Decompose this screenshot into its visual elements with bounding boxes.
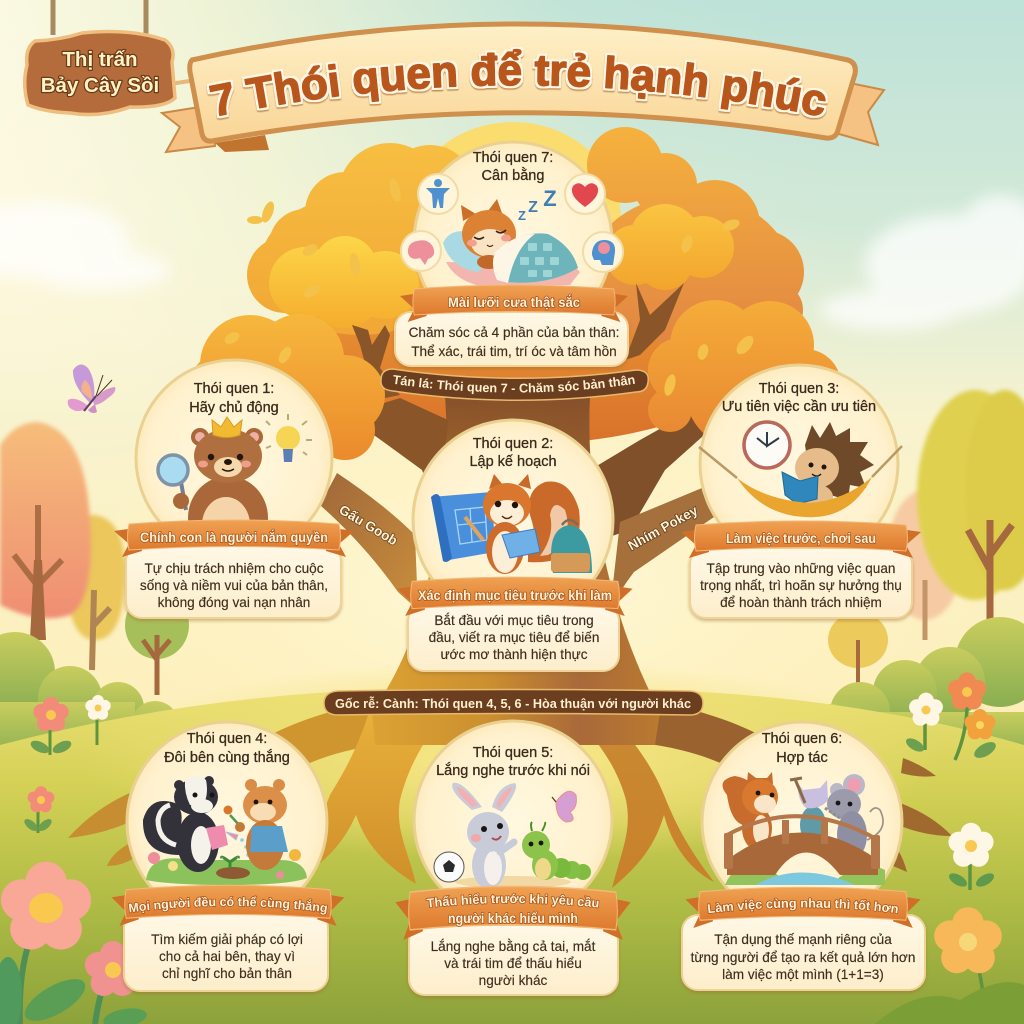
wooden town sign xyxy=(25,0,175,115)
habit 1 circle xyxy=(136,360,332,556)
icon: head with brain xyxy=(583,232,623,272)
banner tail right xyxy=(825,80,884,145)
background trees right xyxy=(828,390,1024,690)
illustration: hedgehog in hammock with clock xyxy=(699,422,902,517)
canopy lower left xyxy=(190,314,385,460)
panel: habit 1 xyxy=(114,360,354,618)
title: 7 Thói quen để trẻ hạnh phúc xyxy=(206,46,828,120)
banner board xyxy=(190,24,855,141)
habit 7 description box xyxy=(395,312,628,366)
habit 5 description: và trái tim để thấu hiểu xyxy=(444,956,582,971)
habit 2 ribbon text: Xác định mục tiêu trước khi làm xyxy=(418,588,612,603)
habit 7 title: Cân bằng xyxy=(482,167,544,184)
icon: heart xyxy=(565,174,605,214)
title banner xyxy=(160,22,886,154)
sign board xyxy=(25,32,175,115)
habit 4 description box xyxy=(124,912,328,991)
flowers right xyxy=(875,672,1024,1024)
habit 3 description: trọng nhất, trì hoãn sự hưởng thụ xyxy=(700,578,902,593)
habit 2 title: Thói quen 2: xyxy=(473,436,553,452)
banner rod xyxy=(170,80,196,84)
habit 3 description: để hoàn thành trách nhiệm xyxy=(720,595,882,610)
label: canopy xyxy=(380,368,649,401)
bushes xyxy=(0,617,1024,760)
habit 1 description box xyxy=(126,545,341,618)
habit 5 description: người khác xyxy=(479,973,548,988)
habit 3 ribbon text: Làm việc trước, chơi sau xyxy=(726,531,876,546)
habit 5 title: Thói quen 5: xyxy=(473,745,553,761)
habit 7 circle xyxy=(414,142,612,340)
canopy forks xyxy=(352,325,400,400)
icon: brain xyxy=(401,231,441,271)
habit 1 description: không đóng vai nạn nhân xyxy=(158,595,310,610)
habit 6 ribbon text: Làm việc cùng nhau thì tốt hơn xyxy=(706,898,898,914)
habit 3 title: Ưu tiên việc cần ưu tiên xyxy=(722,399,876,415)
habit 4 description: chỉ nghĩ cho bản thân xyxy=(162,966,292,981)
illustration: bear with magnifier xyxy=(158,414,312,560)
habit 4 description: cho cả hai bên, thay vì xyxy=(159,949,295,964)
habit 5 ribbon text: người khác hiểu mình xyxy=(448,911,578,926)
habit 7 ribbon text: Mài lưỡi cưa thật sắc xyxy=(448,295,580,310)
habit 5 title: Lắng nghe trước khi nói xyxy=(436,762,590,779)
grass hill xyxy=(0,660,1024,1024)
canopy leaves xyxy=(223,177,757,397)
illustration: friends building a bridge xyxy=(722,772,885,885)
habit 6 title: Thói quen 6: xyxy=(762,731,842,747)
habit 2 description: đầu, viết ra mục tiêu để biến xyxy=(429,630,599,645)
illustration: rabbit, ball, caterpillar xyxy=(434,783,591,889)
habit 6 description: Tận dụng thế mạnh riêng của xyxy=(714,932,892,947)
panel: habit 2 xyxy=(397,420,633,671)
habit 2 description: Bắt đầu với mục tiêu trong xyxy=(434,613,594,628)
canopy shade xyxy=(270,275,750,445)
icon: butterfly xyxy=(68,364,115,413)
habit 4 ribbon text: Mọi người đều có thể cùng thắng xyxy=(128,896,328,916)
panel: habit 6 xyxy=(680,720,927,994)
illustration: sleeping squirrel xyxy=(443,199,580,286)
banner tail left xyxy=(162,105,215,152)
label: roots and branches: Gốc rễ: Cành: Thói quen 4, 5, 6 - Hòa thuận với người khác xyxy=(335,696,691,711)
branch: Gấu Goob xyxy=(320,473,418,610)
habit 4 title: Đôi bên cùng thắng xyxy=(164,749,290,766)
habit 6 title: Hợp tác xyxy=(776,750,828,766)
habit 3 circle xyxy=(700,365,898,563)
illustration: squirrel with blueprint and backpack xyxy=(431,474,592,574)
habit 4 ribbon xyxy=(112,885,344,926)
habit 1 title: Hãy chủ động xyxy=(189,400,279,416)
habit 7 title: Thói quen 7: xyxy=(473,150,553,166)
canopy front yellow left xyxy=(269,236,419,328)
habit 1 description: Tự chịu trách nhiệm cho cuộc xyxy=(144,561,324,576)
habit 1 ribbon xyxy=(114,520,354,557)
background trees left xyxy=(0,422,189,695)
habit 5 ribbon text xyxy=(426,892,600,927)
habit 3 ribbon xyxy=(681,521,921,558)
tree trunk and branches xyxy=(320,395,714,745)
habit 2 description: ước mơ thành hiện thực xyxy=(440,647,588,662)
canopy front yellow right xyxy=(605,204,734,290)
label: roots and branches xyxy=(324,690,703,715)
habit 4 circle xyxy=(127,722,327,922)
habit 5 description box xyxy=(409,925,618,995)
habit 1 description: sống và niềm vui của bản thân, xyxy=(140,578,328,593)
zzz: Z xyxy=(518,208,526,223)
panel: habit 5 xyxy=(396,720,630,999)
habit 6 description: từng người để tạo ra kết quả lớn hơn xyxy=(691,950,915,965)
habit 6 ribbon xyxy=(685,887,921,928)
habit 4 description: Tìm kiếm giải pháp có lợi xyxy=(151,932,303,947)
flowers left xyxy=(0,695,148,1024)
habit 6 circle xyxy=(702,722,902,922)
habit 2 description box xyxy=(408,605,619,671)
sign text: Thị trấn xyxy=(62,48,138,71)
habit 2 title: Lập kế hoạch xyxy=(469,454,557,470)
habit 5 ribbon xyxy=(395,886,631,940)
panel: habit 3 xyxy=(681,365,921,618)
panel: habit 7 xyxy=(395,142,628,366)
habit 3 description: Tập trung vào những việc quan xyxy=(707,561,895,576)
tree roots xyxy=(68,695,952,888)
banner fold xyxy=(215,135,269,152)
habit 4 title: Thói quen 4: xyxy=(187,731,267,747)
habit 2 ribbon xyxy=(397,577,633,616)
habit 6 description: làm việc một mình (1+1=3) xyxy=(722,967,884,982)
tree canopy xyxy=(190,122,841,460)
branch: Nhím Pokey: Nhím Pokey xyxy=(625,503,701,553)
habit 5 ribbon text: Thấu hiểu trước khi yêu cầu xyxy=(426,892,600,908)
icon: body xyxy=(418,174,458,214)
label: canopy: Tán lá: Thói quen 7 - Chăm sóc bản thân xyxy=(393,375,635,394)
habit 2 circle xyxy=(413,420,613,620)
zzz: Z xyxy=(543,186,557,211)
branch: Gấu Goob: Gấu Goob xyxy=(336,502,400,548)
habit 6 description box xyxy=(682,915,925,990)
canopy lower right xyxy=(648,300,841,450)
zzz: Z xyxy=(528,199,538,216)
habit 3 title: Thói quen 3: xyxy=(759,381,839,397)
habit 7 description: Thể xác, trái tim, trí óc và tâm hồn xyxy=(411,344,617,359)
illustration: skunk and bear gardening xyxy=(143,776,307,885)
sign ropes xyxy=(53,0,146,35)
habit 3 description box xyxy=(690,548,912,618)
habit 5 description: Lắng nghe bằng cả tai, mắt xyxy=(431,939,596,954)
habit 1 title: Thói quen 1: xyxy=(194,381,274,397)
habit 5 circle xyxy=(414,721,612,919)
branch: Nhím Pokey xyxy=(610,488,714,610)
clouds xyxy=(0,195,1024,330)
canopy back left xyxy=(247,143,475,335)
sign text: Bảy Cây Sồi xyxy=(41,74,159,97)
canopy back right xyxy=(587,127,804,345)
habit 7 description: Chăm sóc cả 4 phần của bản thân: xyxy=(409,325,619,340)
panel: habit 4 xyxy=(112,720,344,995)
habit 1 ribbon text: Chính con là người nắm quyền xyxy=(140,530,328,545)
habit 7 ribbon xyxy=(400,285,628,322)
canopy top halo xyxy=(405,122,621,318)
